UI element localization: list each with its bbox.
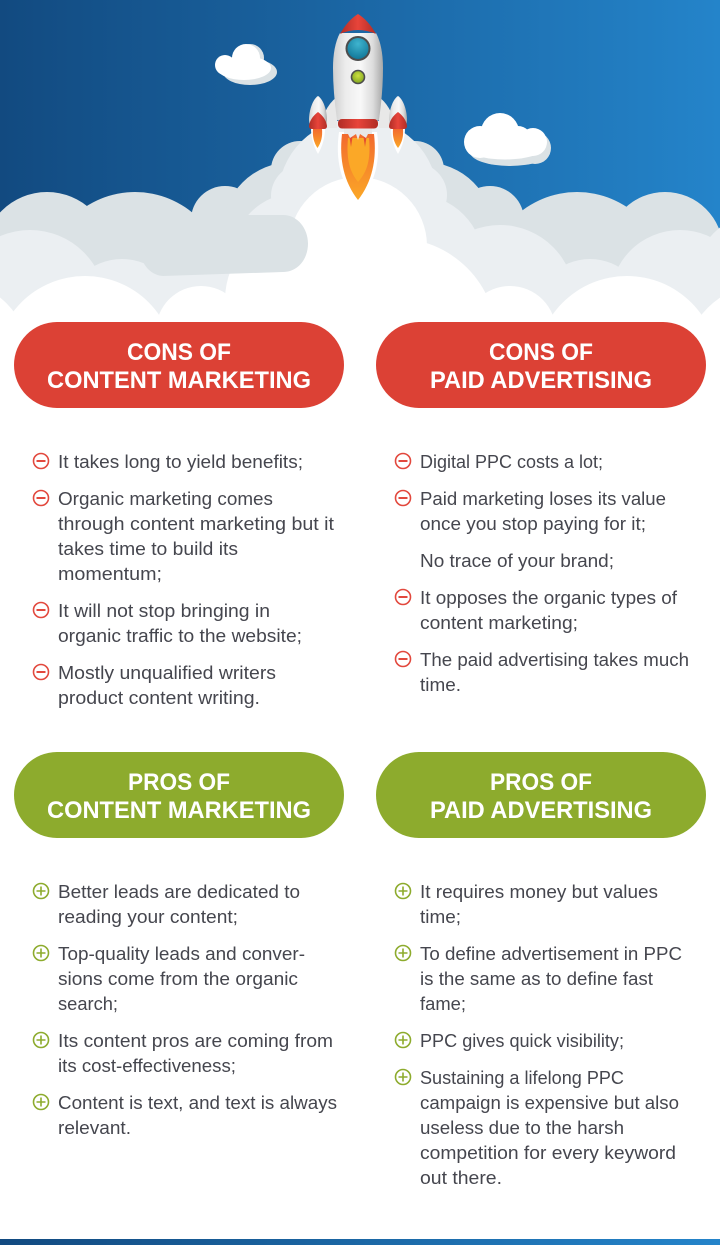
heading: pros of content marketing <box>14 752 344 838</box>
heading: pros of content marketing: CONTENT MARKETING <box>47 797 311 824</box>
item <box>34 943 305 1014</box>
item <box>34 600 302 646</box>
item <box>396 587 678 633</box>
item: It opposes the organic types of <box>420 587 678 608</box>
item <box>34 881 300 927</box>
main flame <box>338 132 378 203</box>
item: search; <box>58 993 118 1014</box>
item <box>396 1067 679 1188</box>
footer gradient bar <box>0 1239 720 1245</box>
item: sions come from the organic <box>58 968 298 989</box>
heading: cons of content marketing <box>14 322 344 408</box>
heading: pros of paid advertising: PROS OF <box>490 769 592 796</box>
sky background <box>0 0 720 330</box>
item <box>34 662 276 708</box>
cloud: back layer <box>0 141 720 372</box>
heading: cons of content marketing: CONTENT MARKETING <box>47 367 311 394</box>
item: takes time to build its <box>58 538 238 559</box>
item: Organic marketing comes <box>58 488 273 509</box>
item: product content writing. <box>58 687 260 708</box>
rocket side fins <box>325 97 391 128</box>
list: cons of paid advertising <box>396 451 689 695</box>
indicator light <box>352 70 364 84</box>
heading: pros of paid advertising: PAID ADVERTISING <box>430 797 652 824</box>
item: time. <box>420 674 461 695</box>
item <box>34 1092 337 1138</box>
item: It requires money but values <box>420 881 658 902</box>
item: momentum; <box>58 563 162 584</box>
left booster flame <box>311 128 325 154</box>
item: out there. <box>420 1167 502 1188</box>
rocket body <box>333 33 383 120</box>
item: Its content pros are coming from <box>58 1030 333 1051</box>
right booster flame <box>391 128 405 154</box>
left booster <box>309 96 327 128</box>
cloud: front white layer <box>0 177 720 458</box>
nozzles <box>344 128 372 140</box>
item: through content marketing but it <box>58 513 334 534</box>
item: It takes long to yield benefits; <box>58 451 303 472</box>
rocket base <box>338 119 378 128</box>
item <box>396 649 689 695</box>
heading: cons of paid advertising <box>376 322 706 408</box>
heading: cons of content marketing: CONS OF <box>127 339 231 366</box>
rocket <box>309 14 407 203</box>
rocket nose <box>340 14 376 34</box>
heading: pros of content marketing: PROS OF <box>128 769 230 796</box>
item: PPC gives quick visibility; <box>420 1030 624 1051</box>
heading: cons of paid advertising: PAID ADVERTISING <box>430 367 652 394</box>
item: Mostly unqualified writers <box>58 662 276 683</box>
item: content marketing; <box>420 612 578 633</box>
small cloud right <box>464 113 551 166</box>
item <box>396 881 658 927</box>
item: Paid marketing loses its value <box>420 488 666 509</box>
item without icon: No trace of your brand; <box>420 550 614 571</box>
item: The paid advertising takes much <box>420 649 689 670</box>
item: organic traffic to the website; <box>58 625 302 646</box>
small cloud left <box>215 44 277 85</box>
item: competition for every keyword <box>420 1142 676 1163</box>
item: useless due to the harsh <box>420 1117 624 1138</box>
item: time; <box>420 906 461 927</box>
cloud: streak beside rocket <box>140 215 308 276</box>
heading: pros of paid advertising <box>376 752 706 838</box>
item: Digital PPC costs a lot; <box>420 451 603 472</box>
item: relevant. <box>58 1117 131 1138</box>
item: Sustaining a lifelong PPC <box>420 1067 624 1088</box>
item: its cost-effectiveness; <box>58 1055 236 1076</box>
list: pros of paid advertising <box>396 881 682 1188</box>
item: reading your content; <box>58 906 238 927</box>
item: campaign is expensive but also <box>420 1092 679 1113</box>
item: fame; <box>420 993 466 1014</box>
item <box>396 488 666 534</box>
item <box>34 488 334 584</box>
item <box>396 943 682 1014</box>
item: Better leads are dedicated to <box>58 881 300 902</box>
item: To define advertisement in PPC <box>420 943 682 964</box>
item: Top-quality leads and conver- <box>58 943 305 964</box>
item: is the same as to define fast <box>420 968 653 989</box>
heading: cons of paid advertising: CONS OF <box>489 339 593 366</box>
item: once you stop paying for it; <box>420 513 646 534</box>
cloud: middle layer <box>0 118 720 382</box>
right booster <box>389 96 407 128</box>
list: cons of content marketing <box>34 451 334 708</box>
item: Content is text, and text is always <box>58 1092 337 1113</box>
item <box>34 1030 333 1076</box>
list: pros of content marketing <box>34 881 337 1138</box>
window <box>346 37 370 60</box>
item: It will not stop bringing in <box>58 600 270 621</box>
